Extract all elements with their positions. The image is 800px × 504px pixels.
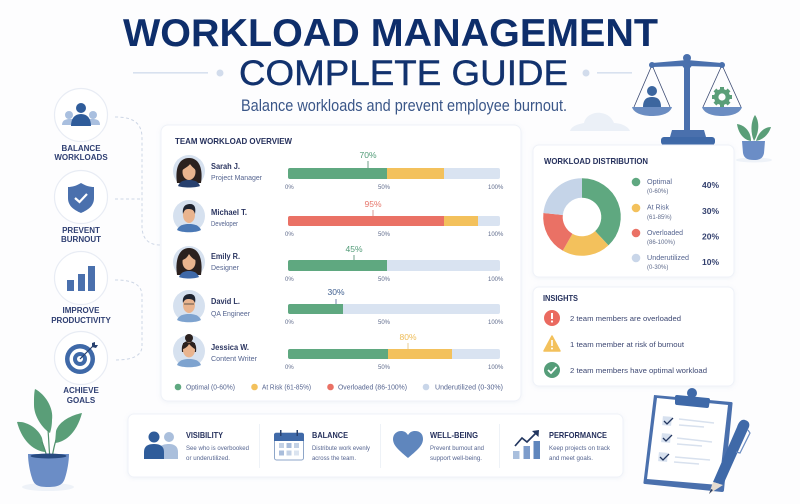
row: Emily R.: Designer — [211, 265, 240, 272]
panel: team workload overview — [161, 125, 521, 401]
row: David L.: 100% — [488, 320, 504, 326]
icon: cloud — [570, 113, 630, 131]
title: COMPLETE GUIDE — [239, 54, 568, 93]
distribution legend: Overloaded — [647, 230, 683, 237]
distribution legend: Optimal — [647, 179, 672, 186]
benefit: visibility: or underutilized. — [186, 455, 230, 462]
row: Jessica W. — [173, 332, 504, 371]
row: Emily R. — [173, 244, 504, 283]
row: Michael T.: 50% — [378, 232, 391, 238]
benefit: performance: PERFORMANCE — [549, 430, 607, 440]
icon: large plant — [17, 389, 82, 491]
label: improve productivity: PRODUCTIVITY — [51, 316, 111, 325]
benefit: balance: Distribute work evenly — [312, 445, 371, 452]
legend: workload levels: Optimal (0-60%) — [186, 384, 235, 392]
row: Michael T. — [173, 199, 504, 238]
benefit: balance: across the team. — [312, 455, 356, 462]
benefit: well-being — [393, 430, 484, 462]
distribution legend: (61-85%) — [647, 215, 672, 221]
connector lines — [115, 117, 160, 360]
insight: at risk: 1 team member at risk of burnout — [570, 340, 685, 349]
title: WORKLOAD MANAGEMENT — [123, 12, 658, 55]
distribution legend: 20% — [702, 232, 719, 242]
label: improve productivity: IMPROVE — [63, 306, 100, 315]
benefit: well-being: WELL-BEING — [430, 430, 478, 440]
panel: benefits — [128, 414, 623, 477]
distribution legend: 10% — [702, 257, 719, 267]
row: Michael T.: Michael T. — [211, 208, 247, 217]
insight: overloaded: 2 team members are overloaded — [570, 314, 681, 323]
row: Emily R.: Emily R. — [211, 252, 240, 261]
distribution legend: (0-30%) — [647, 265, 668, 271]
row: Sarah J.: 50% — [378, 185, 391, 191]
row: David L.: David L. — [211, 297, 240, 306]
insight: optimal: 2 team members have optimal workload — [570, 366, 707, 375]
label: achieve goals: ACHIEVE — [63, 386, 99, 395]
label: balance workloads: BALANCE — [61, 144, 101, 153]
panel: insights — [533, 287, 734, 386]
row: Michael T.: 0% — [285, 232, 294, 238]
benefit: balance — [274, 430, 371, 462]
donut chart — [553, 188, 611, 246]
benefit: visibility — [144, 430, 249, 462]
icon: balance scale — [632, 54, 742, 145]
row: Jessica W.: 50% — [378, 365, 391, 371]
distribution legend: (86-100%) — [647, 240, 675, 246]
panel heading: INSIGHTS — [543, 293, 578, 303]
row: Sarah J.: 0% — [285, 185, 294, 191]
benefit: visibility: See who is overbooked — [186, 445, 249, 452]
icon: small plant — [736, 115, 772, 162]
row: Sarah J.: 100% — [488, 185, 504, 191]
insight: at risk — [544, 336, 685, 351]
distribution legend: Underutilized — [647, 255, 689, 262]
label: balance workloads: WORKLOADS — [54, 153, 108, 162]
panel heading: TEAM WORKLOAD OVERVIEW — [175, 136, 293, 146]
icon circle: prevent burnout — [54, 170, 108, 224]
legend: workload levels: Overloaded (86-100%) — [338, 384, 407, 392]
row: Emily R.: 45% — [345, 244, 363, 254]
benefit: performance: Keep projects on track — [549, 445, 611, 452]
row: Sarah J.: Sarah J. — [211, 162, 240, 171]
panel: workload distribution — [533, 145, 734, 277]
icon circle: achieve goals — [54, 332, 108, 384]
row: Sarah J.: 70% — [359, 150, 377, 160]
row: Jessica W.: Content Writer — [211, 356, 258, 363]
row: Jessica W.: 80% — [399, 332, 417, 342]
row: Sarah J.: Project Manager — [211, 175, 263, 182]
row: Michael T.: Developer — [211, 221, 239, 228]
row: Michael T.: 95% — [364, 199, 382, 209]
row: David L.: 30% — [327, 287, 345, 297]
benefit: visibility: VISIBILITY — [186, 430, 223, 440]
subtitle: Balance workloads and prevent employee burnout. — [241, 97, 567, 115]
label: prevent burnout: BURNOUT — [61, 235, 101, 244]
legend: workload levels — [175, 384, 503, 392]
distribution legend: At Risk — [647, 204, 669, 212]
row: David L.: 50% — [378, 320, 391, 326]
row: Emily R.: 0% — [285, 277, 294, 283]
row: David L. — [173, 287, 504, 326]
row: Jessica W.: Jessica W. — [211, 343, 249, 352]
row: Jessica W.: 100% — [488, 365, 504, 371]
icon circle: improve productivity — [54, 252, 108, 304]
benefit: performance — [513, 430, 611, 462]
distribution legend: 40% — [702, 180, 719, 190]
label: achieve goals: GOALS — [67, 396, 96, 405]
row: David L.: 0% — [285, 320, 294, 326]
row: David L.: QA Engineer — [211, 311, 251, 318]
legend: workload levels: Underutilized (0-30%) — [435, 384, 503, 392]
row: Jessica W.: 0% — [285, 365, 294, 371]
distribution legend: (0-60%) — [647, 189, 668, 195]
benefit: well-being: support well-being. — [430, 455, 482, 462]
benefit: performance: and meet goals. — [549, 455, 593, 462]
distribution legend: 30% — [702, 206, 719, 216]
row: Emily R.: 100% — [488, 277, 504, 283]
row: Sarah J. — [173, 150, 504, 191]
insight: optimal — [544, 362, 707, 378]
label: prevent burnout: PREVENT — [62, 226, 100, 235]
distribution legend — [632, 178, 719, 271]
icon circle: balance workloads — [54, 88, 108, 142]
benefit: well-being: Prevent burnout and — [430, 445, 484, 452]
icon: clipboard with pen — [643, 388, 750, 494]
row: Emily R.: 50% — [378, 277, 391, 283]
row: Michael T.: 100% — [488, 232, 504, 238]
benefit: balance: BALANCE — [312, 430, 348, 440]
title — [123, 12, 658, 93]
insight: overloaded — [544, 310, 681, 326]
panel heading: WORKLOAD DISTRIBUTION — [544, 156, 648, 166]
legend: workload levels: At Risk (61-85%) — [262, 384, 311, 392]
